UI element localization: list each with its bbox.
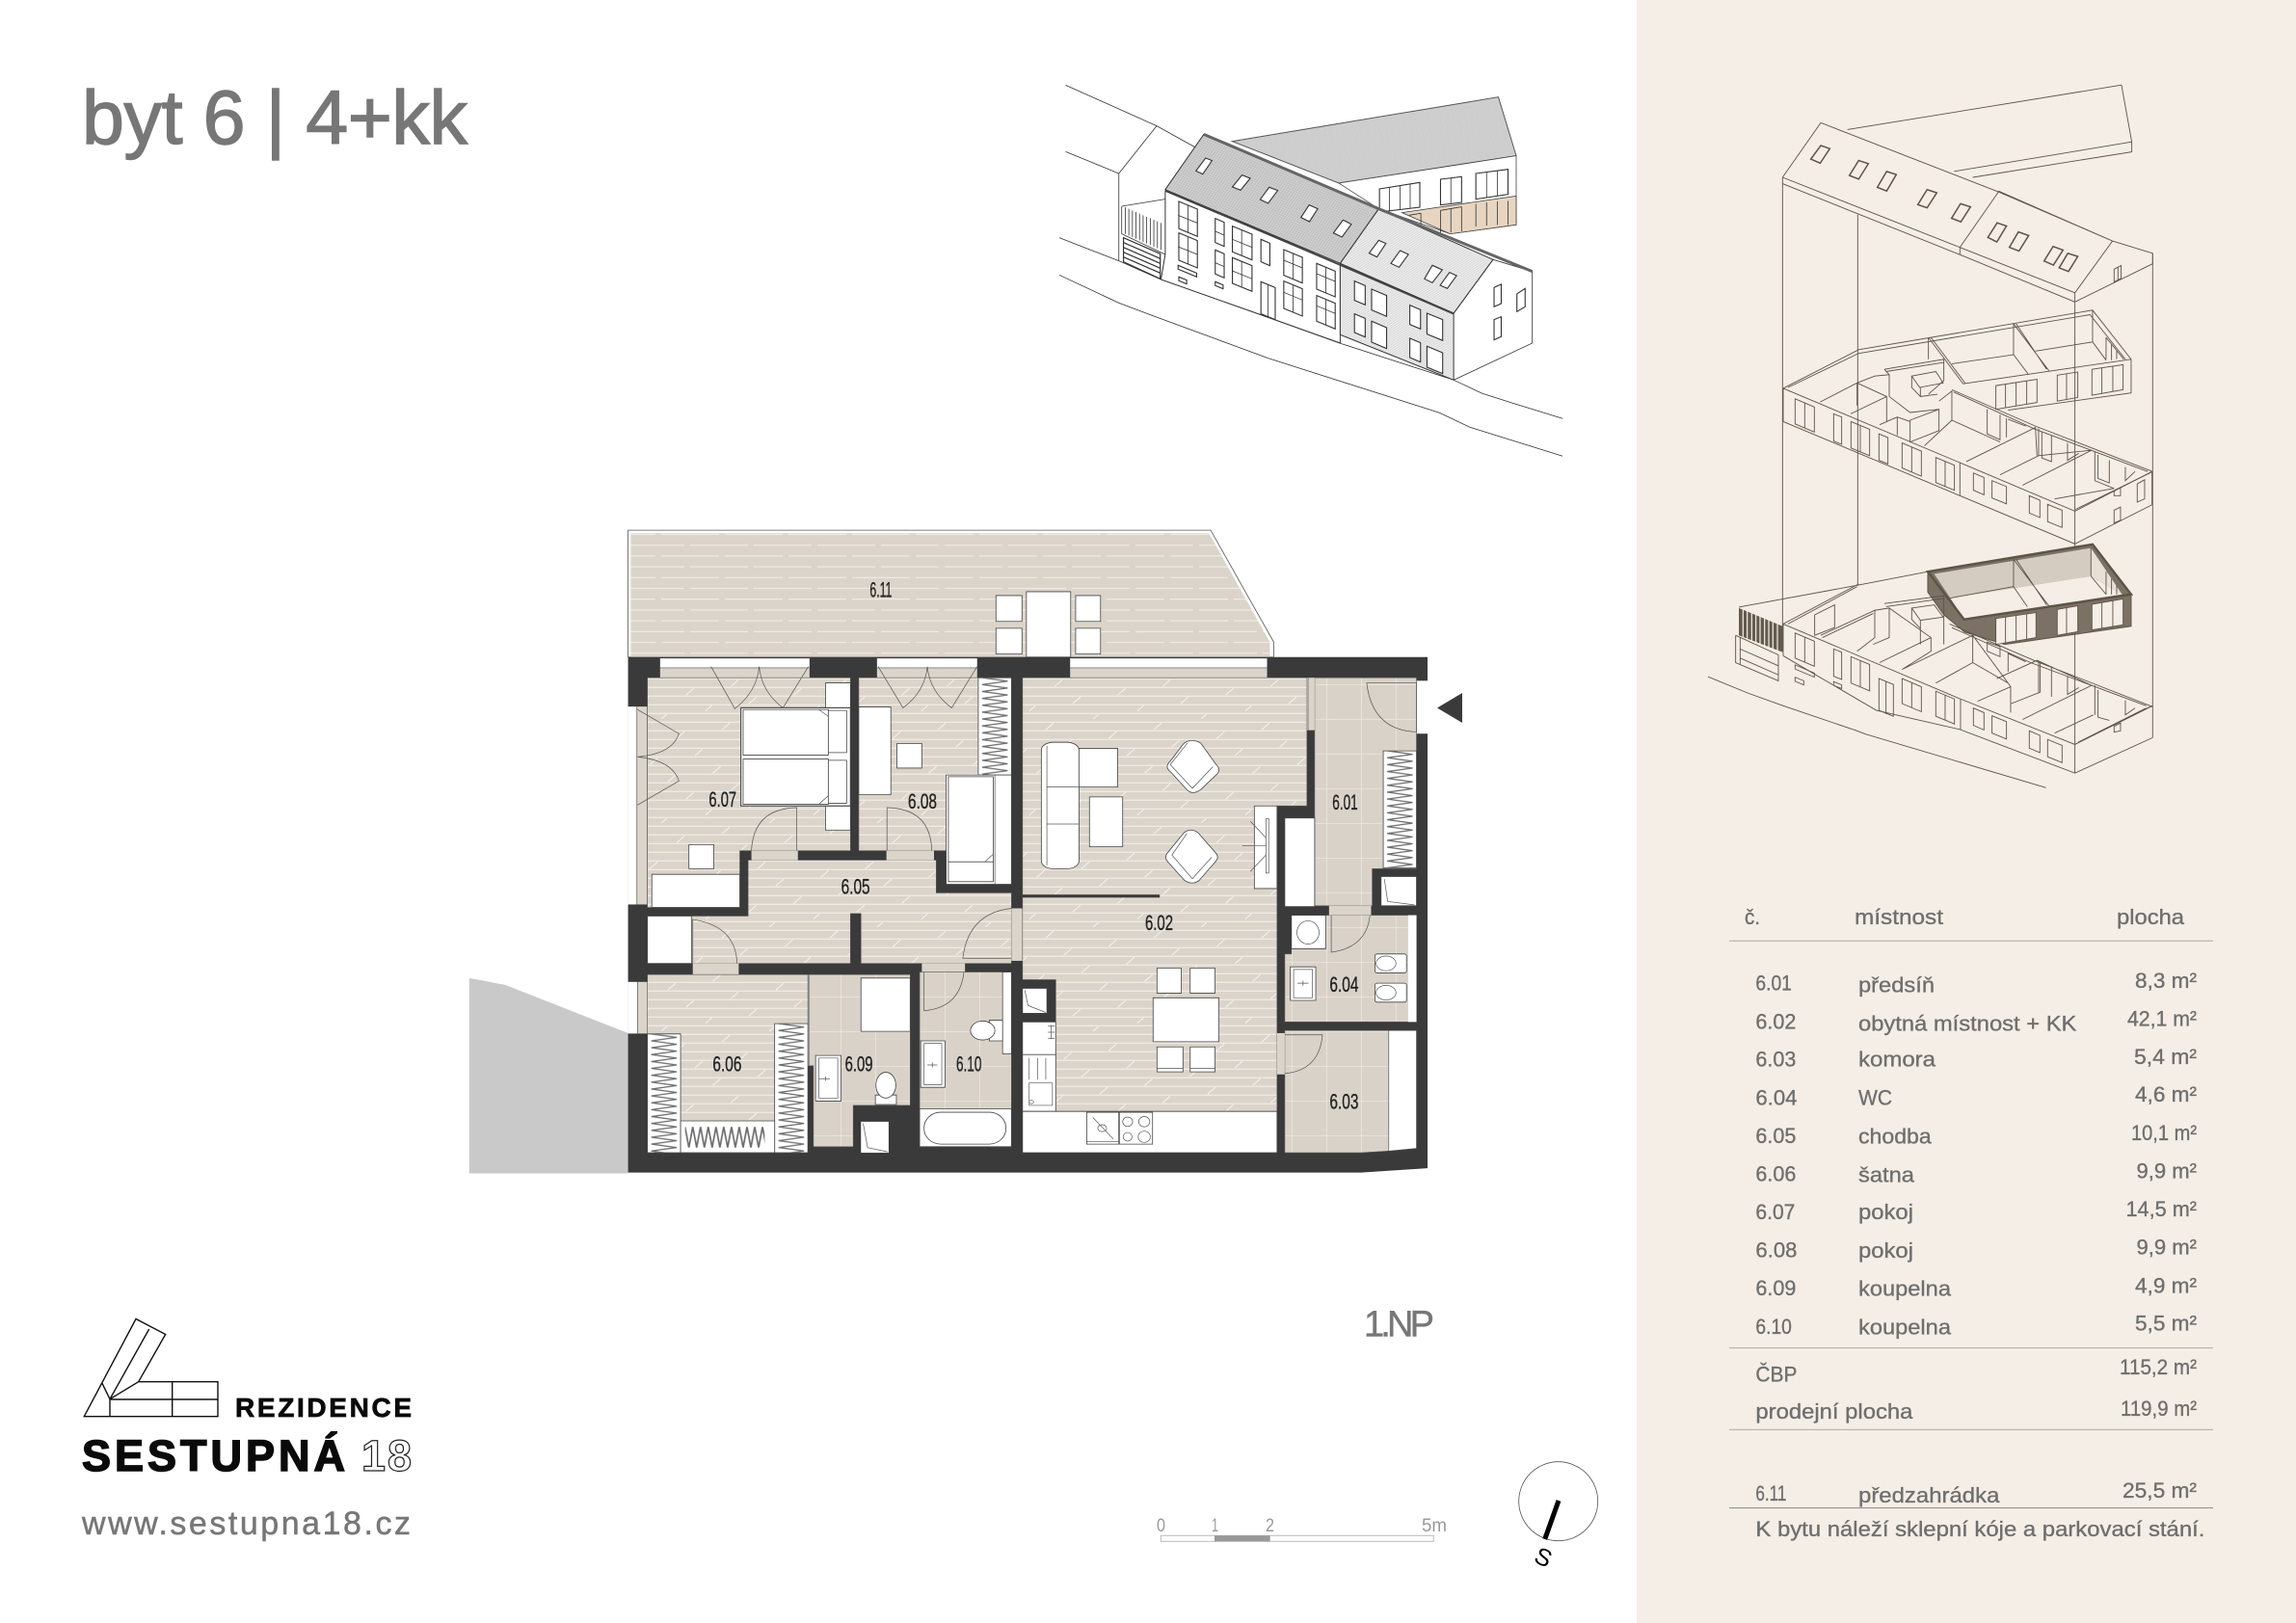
inner wall separator [808,974,810,1066]
table garden row: předzahrádka [1858,1483,2000,1507]
table totals: ČBP [1755,1362,1797,1386]
table rows: 6.10 [1755,1315,1792,1339]
table rows: 9,9 m² [2136,1159,2197,1184]
kitchen units [1023,980,1277,1153]
room number labels: 6.04 [1329,972,1358,997]
exploded axo: upper floor [1783,310,2152,544]
table rows: 42,1 m² [2127,1007,2197,1031]
room number labels: 6.03 [1329,1089,1358,1114]
scale bar: 5m [1422,1515,1447,1536]
icon: entrance arrow [1437,693,1462,723]
table rows: 5,4 m² [2134,1045,2198,1069]
logo mark [84,1318,218,1417]
table rows: 6.05 [1755,1124,1796,1148]
room number labels: 6.11 [869,577,892,601]
exploded axo: vertical guides [1782,177,2152,773]
table rows: předsíň [1858,972,1935,997]
exploded axo: ground level of the building [1708,572,2152,787]
table rows: chodba [1858,1124,1932,1149]
table note: K bytu náleží sklepní kóje a parkovací stání. [1755,1517,2204,1541]
room 6.07 bedroom [637,667,850,908]
table rows: 6.02 [1755,1009,1796,1033]
table rows: 6.08 [1755,1237,1797,1262]
table totals: prodejní plocha [1755,1399,1913,1423]
icon: compass [1519,1462,1598,1573]
table rows: 6.06 [1755,1161,1796,1185]
table totals [1729,1348,2213,1429]
isometric view of the building [1059,85,1562,456]
table rows: 9,9 m² [2136,1236,2197,1260]
table rows: koupelna [1858,1315,1951,1339]
room 6.05 corridor [648,851,1023,974]
logo name: SESTUPNÁ [82,1431,345,1480]
table header: č. [1745,905,1760,929]
table header: místnost [1855,905,1944,929]
table rows: 4,9 m² [2135,1273,2198,1297]
room 6.04 toilet [1285,906,1417,1022]
room 6.08 bedroom [859,667,1011,884]
exploded axo: roof level [1782,85,2152,302]
table garden row: 25,5 m² [2122,1478,2198,1503]
table header [1729,905,2213,941]
room 6.09 bathroom [809,974,910,1153]
table rows: 10,1 m² [2131,1121,2197,1145]
table rows: WC [1858,1085,1892,1109]
room 6.03 storage [1277,1030,1417,1153]
window openings [628,658,1428,1033]
room number labels: 6.02 [1145,911,1173,935]
room number labels: 6.06 [712,1052,741,1077]
table rows: pokoj [1858,1200,1913,1224]
room 6.01 entrance hall [1285,678,1417,907]
room number labels [708,577,1358,1114]
table rows: pokoj [1858,1238,1913,1263]
website: www.sestupna18.cz [81,1505,411,1542]
logo number: 18 [361,1431,412,1480]
table rows: komora [1858,1048,1936,1072]
table garden row [1729,1478,2213,1508]
table rows: 6.01 [1755,971,1792,996]
room number labels: 6.05 [841,874,870,898]
title: byt 6 | 4+kk [82,74,468,160]
room number labels: 6.01 [1332,790,1358,814]
room 6.11 garden terrace [628,530,1273,657]
scale bar: 1 [1212,1515,1218,1536]
table rows: koupelna [1858,1276,1951,1301]
scale bar [1157,1515,1447,1541]
table rows: 6.07 [1755,1200,1795,1224]
room number labels: 6.10 [956,1052,981,1077]
room number labels: 6.09 [845,1052,873,1077]
area table [1729,905,2213,1541]
room 6.06 walk-in wardrobe [648,974,808,1153]
scale bar: 2 [1266,1515,1274,1536]
room number labels: 6.08 [908,789,937,813]
table rows: 4,6 m² [2135,1082,2198,1106]
room number labels: 6.07 [708,787,736,812]
table garden row: 6.11 [1755,1481,1786,1505]
table rows: 5,5 m² [2135,1312,2198,1336]
table rows: 14,5 m² [2126,1197,2197,1221]
table rows: 6.03 [1755,1048,1796,1072]
walls [628,657,1428,1173]
room 6.10 bathroom [920,972,1011,1147]
exploded axo: highlighted apartment [1928,545,2131,645]
scale bar: 0 [1157,1515,1165,1536]
table rows: 6.09 [1755,1276,1796,1300]
exploded axonometric diagram of the floors [1708,85,2152,787]
table rows: obytná místnost + KK [1858,1012,2076,1036]
table totals: 119,9 m² [2121,1397,2197,1421]
panel: right information column [1637,0,2296,1623]
terrain section [469,978,628,1173]
floor plan [469,530,1428,1173]
table totals: 115,2 m² [2120,1355,2197,1379]
floor label: 1.NP [1364,1305,1434,1345]
logo [84,1318,412,1423]
icon: compass: S [1530,1542,1556,1573]
table rows: 8,3 m² [2135,969,2198,993]
logo wordmark: REZIDENCE [235,1393,412,1423]
table rows: šatna [1858,1162,1915,1186]
table rows [1755,969,2198,1339]
table rows: 6.04 [1755,1085,1797,1109]
room 6.02 living room with kitchen [1023,678,1307,1111]
table header: plocha [2117,905,2185,929]
